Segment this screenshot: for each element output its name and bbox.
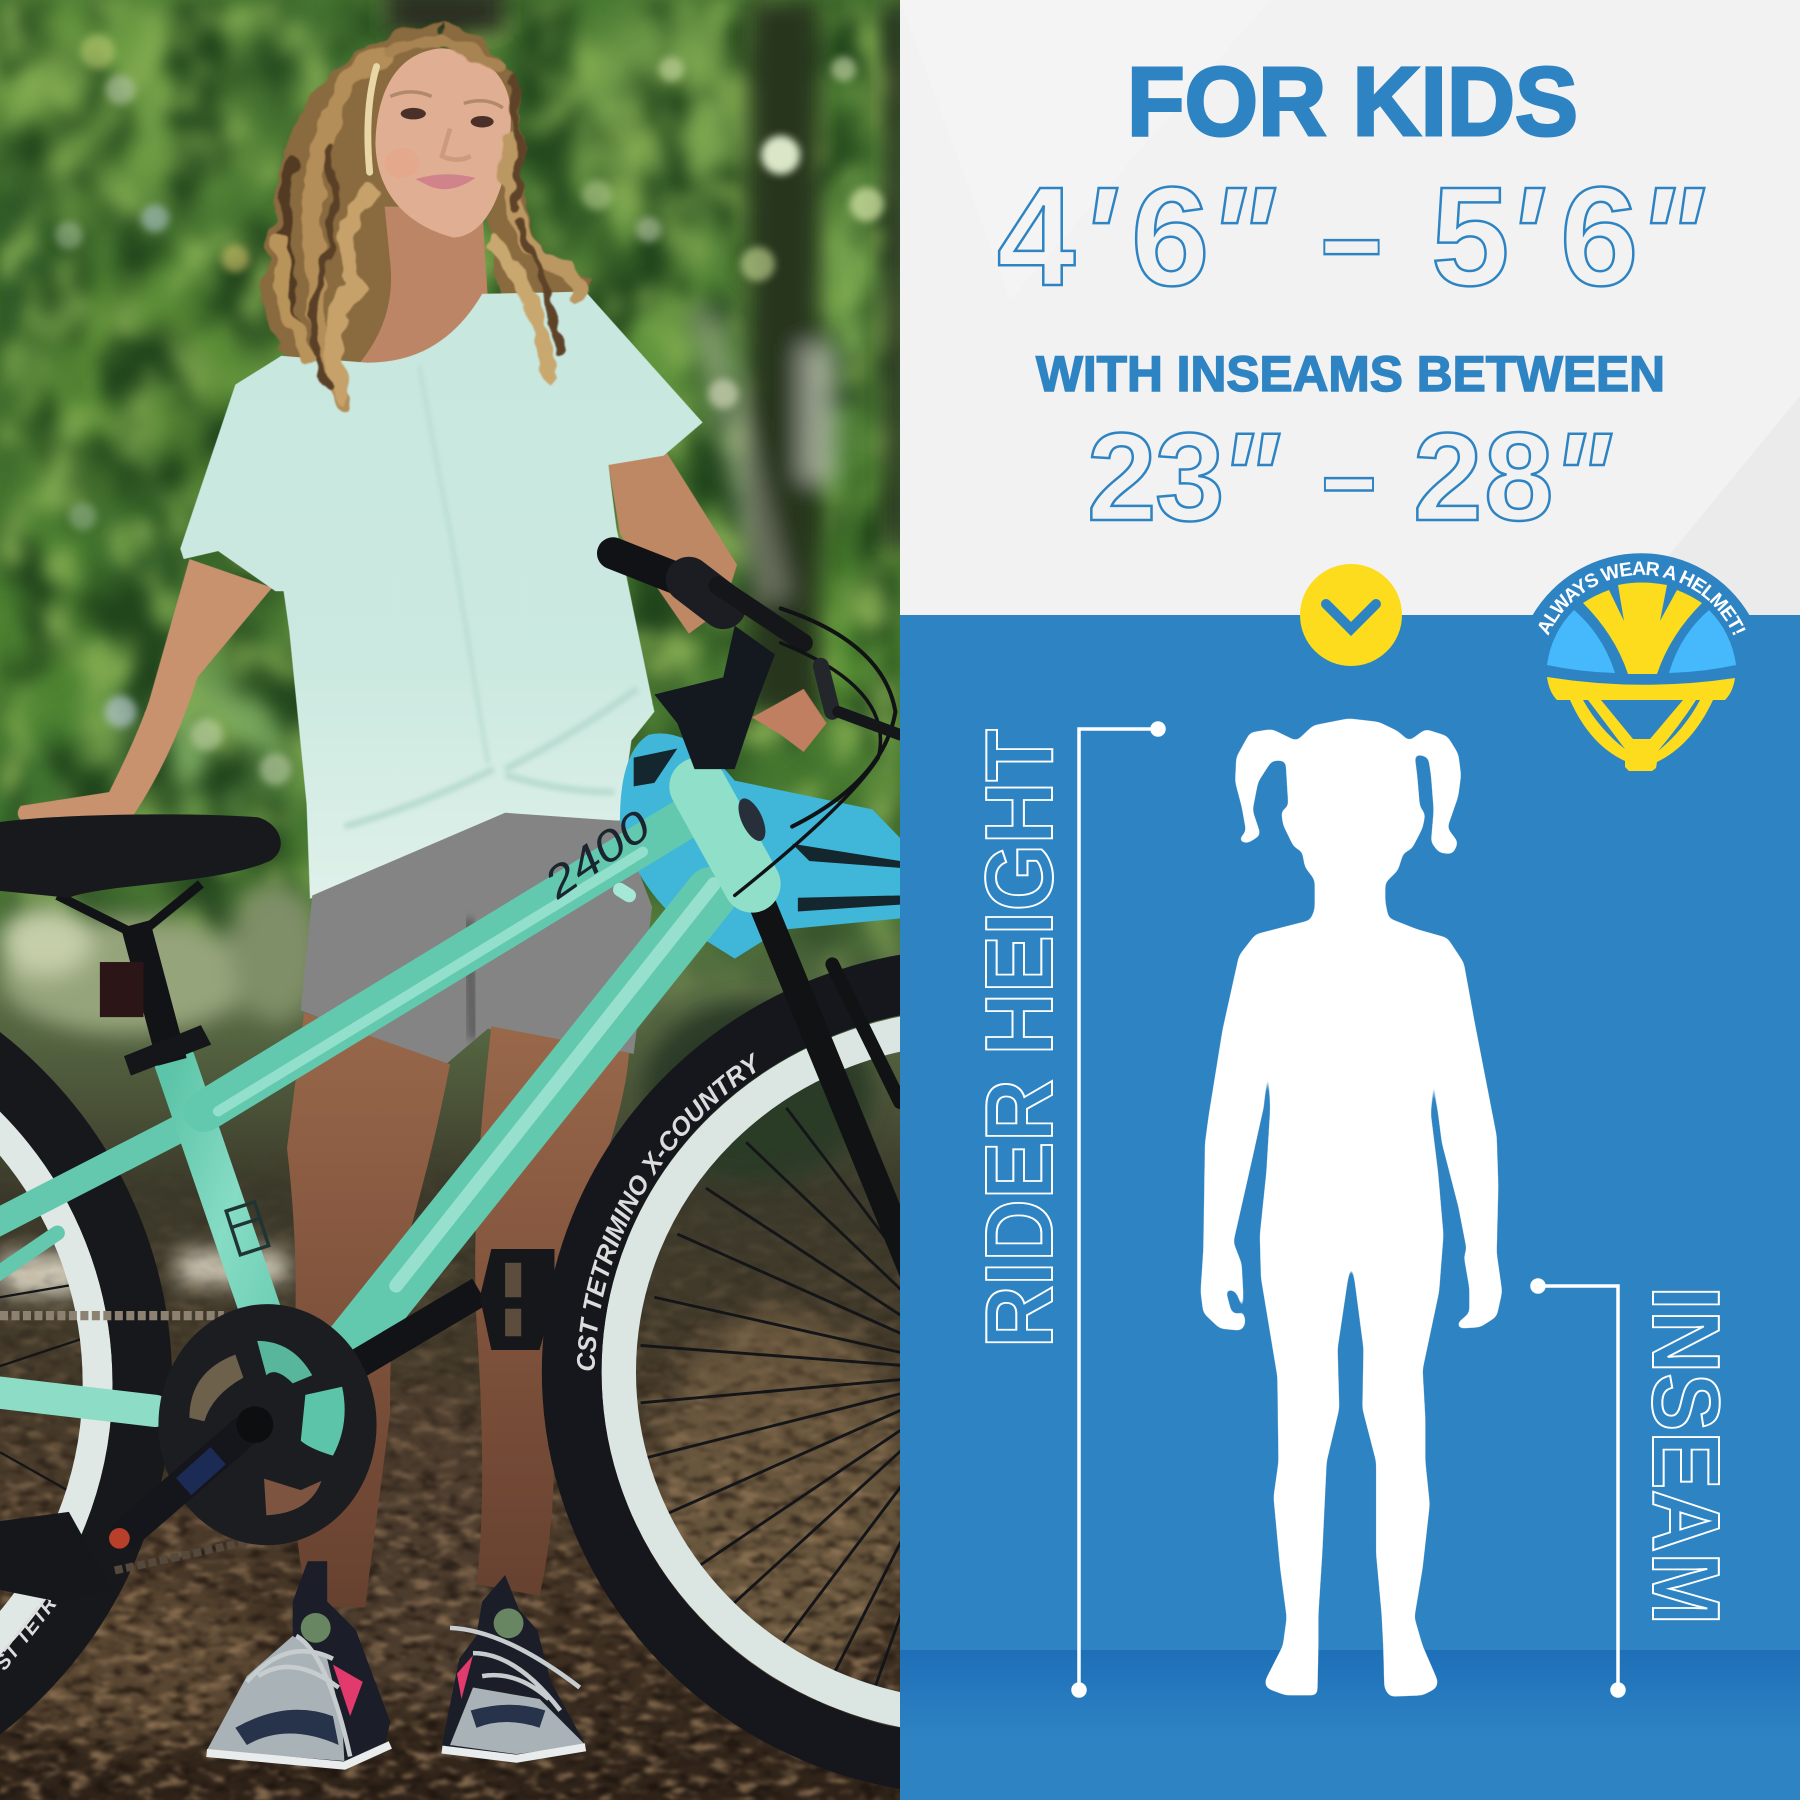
shorts crease	[468, 918, 473, 1039]
height range: '	[1080, 157, 1118, 315]
handlebar	[613, 553, 900, 895]
fork	[763, 907, 918, 1286]
shoes	[207, 1561, 585, 1766]
grey shorts	[301, 813, 652, 1068]
drivetrain: chain, chainring, cranks, pedals	[0, 1249, 554, 1601]
heading: FOR KIDS: FOR KIDS	[1127, 47, 1578, 156]
left arm	[18, 559, 272, 822]
height range: "	[1207, 157, 1276, 315]
photo: girl with mint bike in forest	[0, 0, 1416, 1800]
bike frame	[0, 786, 752, 1412]
frame badge	[226, 1202, 269, 1255]
rider height bracket	[1073, 723, 1164, 1696]
inseam label: INSEAM	[1632, 1286, 1739, 1625]
height range: 5	[1431, 157, 1509, 315]
height range: '	[1507, 157, 1545, 315]
height dash: –	[1321, 157, 1382, 315]
height range: 6	[1131, 157, 1209, 315]
helmet	[620, 733, 900, 959]
panel: blue silhouette background	[900, 615, 1800, 1800]
subheading: with inseams between: WITH INSEAMS BETWEEN	[1036, 346, 1665, 402]
inseam range: "	[1219, 408, 1280, 547]
inseam bracket	[1532, 1280, 1624, 1696]
helmet badge lettering: ALWAYS WEAR A HELMET!	[1538, 562, 1746, 636]
shirt seam and folds	[344, 365, 637, 827]
neck	[356, 207, 488, 367]
t-shirt	[180, 292, 703, 899]
face	[375, 48, 511, 238]
seat post and saddle	[0, 814, 281, 1076]
child silhouette	[1201, 718, 1502, 1697]
rider height label: RIDER HEIGHT	[966, 729, 1073, 1348]
bokeh highlights	[55, 34, 884, 785]
icon: yellow chevron button	[1300, 564, 1402, 666]
facial features	[385, 92, 503, 189]
height range: 6	[1560, 157, 1638, 315]
height range: "	[1636, 157, 1705, 315]
inseam range: 3	[1155, 408, 1225, 547]
hand on bar	[752, 689, 827, 752]
inseam dash: –	[1322, 406, 1376, 545]
front wheel	[572, 978, 1380, 1766]
legs	[287, 1013, 450, 1607]
forest background blur	[0, 0, 930, 1800]
tire lettering: CST TETRIMINO X-COUNTRY	[576, 1052, 756, 1370]
inseam range: 8	[1484, 408, 1554, 547]
panel: light sizing background	[900, 0, 1800, 616]
right arm	[608, 448, 737, 634]
hair curls in front	[280, 42, 580, 402]
girl	[18, 23, 827, 1766]
icon: always wear a helmet badge	[1532, 553, 1750, 771]
hair back	[259, 20, 592, 362]
inseam range: 2	[1413, 408, 1483, 547]
inseam range: 2	[1087, 408, 1157, 547]
frame model number: 2400	[535, 802, 660, 909]
rear wheel	[0, 969, 142, 1798]
blonde highlight	[368, 67, 377, 172]
height range: 4	[997, 157, 1075, 315]
inseam range: "	[1551, 408, 1612, 547]
